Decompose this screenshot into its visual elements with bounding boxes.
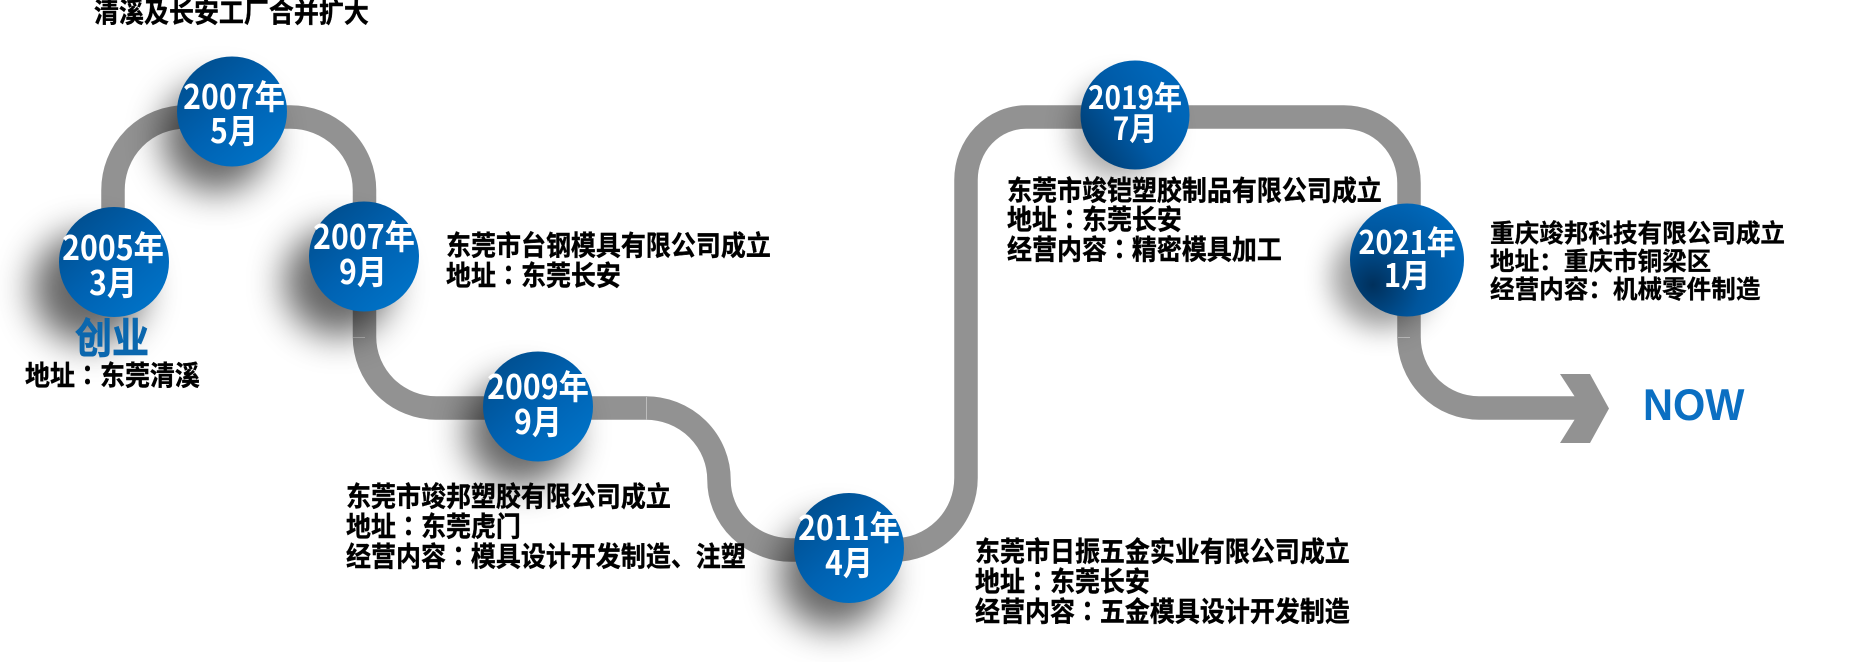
NOW label: NOW <box>1643 381 1745 430</box>
text: Junkai plastics company <box>1007 175 1382 267</box>
text: Junkai plastics company: 地址：东莞长安 <box>1007 198 1182 237</box>
text: Taigang mould company <box>446 230 771 293</box>
milestone 2007-09: 2007年 <box>313 211 415 260</box>
milestone 2005-03 <box>59 207 169 317</box>
milestone 2007-05: 5月 <box>210 105 258 154</box>
timeline path with arrow <box>113 117 1609 550</box>
circle shadows <box>32 82 1432 629</box>
text: Chongqing Junbang company: 地址：重庆市铜梁区 <box>1490 248 1711 276</box>
milestone 2021-01: 2021年 <box>1358 216 1456 263</box>
text: Rizhen hardware company: 东莞市日振五金实业有限公司成立 <box>975 536 1350 567</box>
startup heading: 创业 <box>75 306 149 366</box>
milestone 2007-09: 9月 <box>339 246 387 295</box>
text: Rizhen hardware company <box>975 536 1350 629</box>
text: Junbang plastics company: 地址：东莞虎门 <box>346 505 521 544</box>
address: Qingxi: 地址：东莞清溪 <box>25 354 200 393</box>
milestone 2009-09 <box>483 352 593 462</box>
milestone 2019-07 <box>1080 60 1190 170</box>
milestone 2019-07: 7月 <box>1113 103 1157 150</box>
text: Rizhen hardware company: 经营内容：五金模具设计开发制造 <box>975 590 1350 629</box>
milestone 2005-03: 3月 <box>89 257 137 306</box>
milestone 2011-04: 2011年 <box>798 502 900 551</box>
milestone 2021-01 <box>1350 204 1464 316</box>
text: Chongqing Junbang company: 重庆竣邦科技有限公司成立 <box>1490 220 1785 248</box>
milestone 2019-07: 2019年 <box>1088 72 1182 119</box>
text: Junkai plastics company: 经营内容：精密模具加工 <box>1007 228 1282 267</box>
text: Junbang plastics company <box>346 481 746 574</box>
text: Chongqing Junbang company <box>1490 220 1785 304</box>
text: Junkai plastics company: 东莞市竣铠塑胶制品有限公司成立 <box>1007 175 1382 206</box>
text: Junbang plastics company: 经营内容：模具设计开发制造、注塑 <box>346 535 746 574</box>
milestone 2021-01: 1月 <box>1384 249 1430 296</box>
milestone 2007-05 <box>177 56 287 166</box>
milestone 2009-09: 9月 <box>514 396 562 445</box>
milestone 2011-04 <box>794 493 904 603</box>
text: Taigang mould company: 地址：东莞长安 <box>446 254 621 293</box>
milestone 2007-05: 2007年 <box>183 71 285 120</box>
text: Chongqing Junbang company: 经营内容：机械零件制造 <box>1490 275 1761 304</box>
milestone 2009-09: 2009年 <box>487 361 589 410</box>
milestone 2007-09 <box>309 202 419 312</box>
milestone 2005-03: 2005年 <box>62 222 164 271</box>
text: Taigang mould company: 东莞市台钢模具有限公司成立 <box>446 230 771 261</box>
milestone 2011-04: 4月 <box>825 537 873 586</box>
text: Rizhen hardware company: 地址：东莞长安 <box>975 560 1150 599</box>
text: Junbang plastics company: 东莞市竣邦塑胶有限公司成立 <box>346 481 671 512</box>
